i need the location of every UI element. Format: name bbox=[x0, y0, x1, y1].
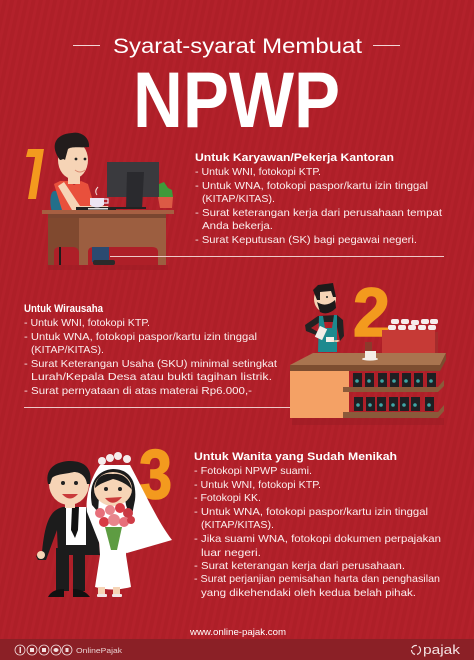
text block: wirausaha: - Surat pernyataan di atas materai Rp6.000,- bbox=[24, 385, 253, 397]
title: NPWP bbox=[133, 55, 340, 144]
text block: wanita menikah: - Untuk WNI, fotokopi KTP. bbox=[194, 479, 321, 491]
footer bar: OnlinePajak bbox=[76, 646, 122, 655]
text block: wirausaha: Untuk Wirausaha bbox=[24, 303, 104, 315]
text block: wanita menikah: - Jika suami WNA, fotokopi dokumen perpajakan bbox=[194, 533, 441, 545]
text block: wanita menikah: luar negeri. bbox=[201, 547, 261, 559]
title: Syarat-syarat Membuat bbox=[113, 35, 362, 58]
number 3: 3 bbox=[139, 435, 172, 513]
footer bar: pajak bbox=[423, 643, 461, 657]
text block: wanita menikah: - Untuk WNA, fotokopi paspor/kartu izin tinggal bbox=[194, 506, 428, 518]
illustration: office worker at desk bbox=[42, 133, 174, 270]
text block: wanita menikah: (KITAP/KITAS). bbox=[201, 519, 274, 531]
text block: karyawan: - Surat keterangan kerja dari perusahaan tempat bbox=[195, 207, 442, 219]
text block: wanita menikah: - Surat keterangan kerja dari perusahaan. bbox=[194, 560, 405, 572]
text block: karyawan: - Surat Keputusan (SK) bagi pegawai negeri. bbox=[195, 234, 417, 246]
number 1 bbox=[26, 149, 44, 199]
text block: wanita menikah: yang dikehendaki oleh kedua belah pihak. bbox=[201, 587, 416, 599]
text block: wirausaha bbox=[24, 303, 277, 397]
text block: karyawan: Anda bekerja. bbox=[202, 220, 273, 232]
text block: karyawan: Untuk Karyawan/Pekerja Kantoran bbox=[195, 152, 394, 164]
illustration: bride and groom bbox=[36, 452, 172, 597]
text block: wirausaha: Lurah/Kepala Desa atau bukti tagihan listrik. bbox=[31, 371, 272, 383]
text block: wanita menikah: - Surat perjanjian pemisahan harta dan penghasilan bbox=[194, 573, 440, 585]
text block: wanita menikah: - Fotokopi KK. bbox=[194, 492, 261, 504]
text block: wirausaha: - Untuk WNA, fotokopi paspor/kartu izin tinggal bbox=[24, 331, 257, 343]
text block: karyawan bbox=[195, 152, 442, 246]
text block: karyawan: - Untuk WNI, fotokopi KTP. bbox=[195, 166, 321, 178]
text block: wirausaha: - Untuk WNI, fotokopi KTP. bbox=[24, 317, 150, 329]
text block: wanita menikah bbox=[194, 451, 441, 599]
text block: wanita menikah: Untuk Wanita yang Sudah Menikah bbox=[194, 451, 397, 463]
title bbox=[73, 35, 400, 144]
number 2: 2 bbox=[353, 274, 390, 351]
social icons bbox=[15, 645, 72, 655]
text block: karyawan: (KITAP/KITAS). bbox=[202, 193, 275, 205]
text block: wirausaha: (KITAP/KITAS). bbox=[31, 344, 104, 356]
footer bar bbox=[0, 639, 474, 660]
text block: wirausaha: - Surat Keterangan Usaha (SKU) minimal setingkat bbox=[24, 358, 277, 370]
text block: karyawan: - Untuk WNA, fotokopi paspor/kartu izin tinggal bbox=[195, 180, 428, 192]
illustration: barista at counter bbox=[290, 283, 446, 425]
text block: wanita menikah: - Fotokopi NPWP suami. bbox=[194, 465, 312, 477]
website url: www.online-pajak.com bbox=[189, 627, 286, 638]
